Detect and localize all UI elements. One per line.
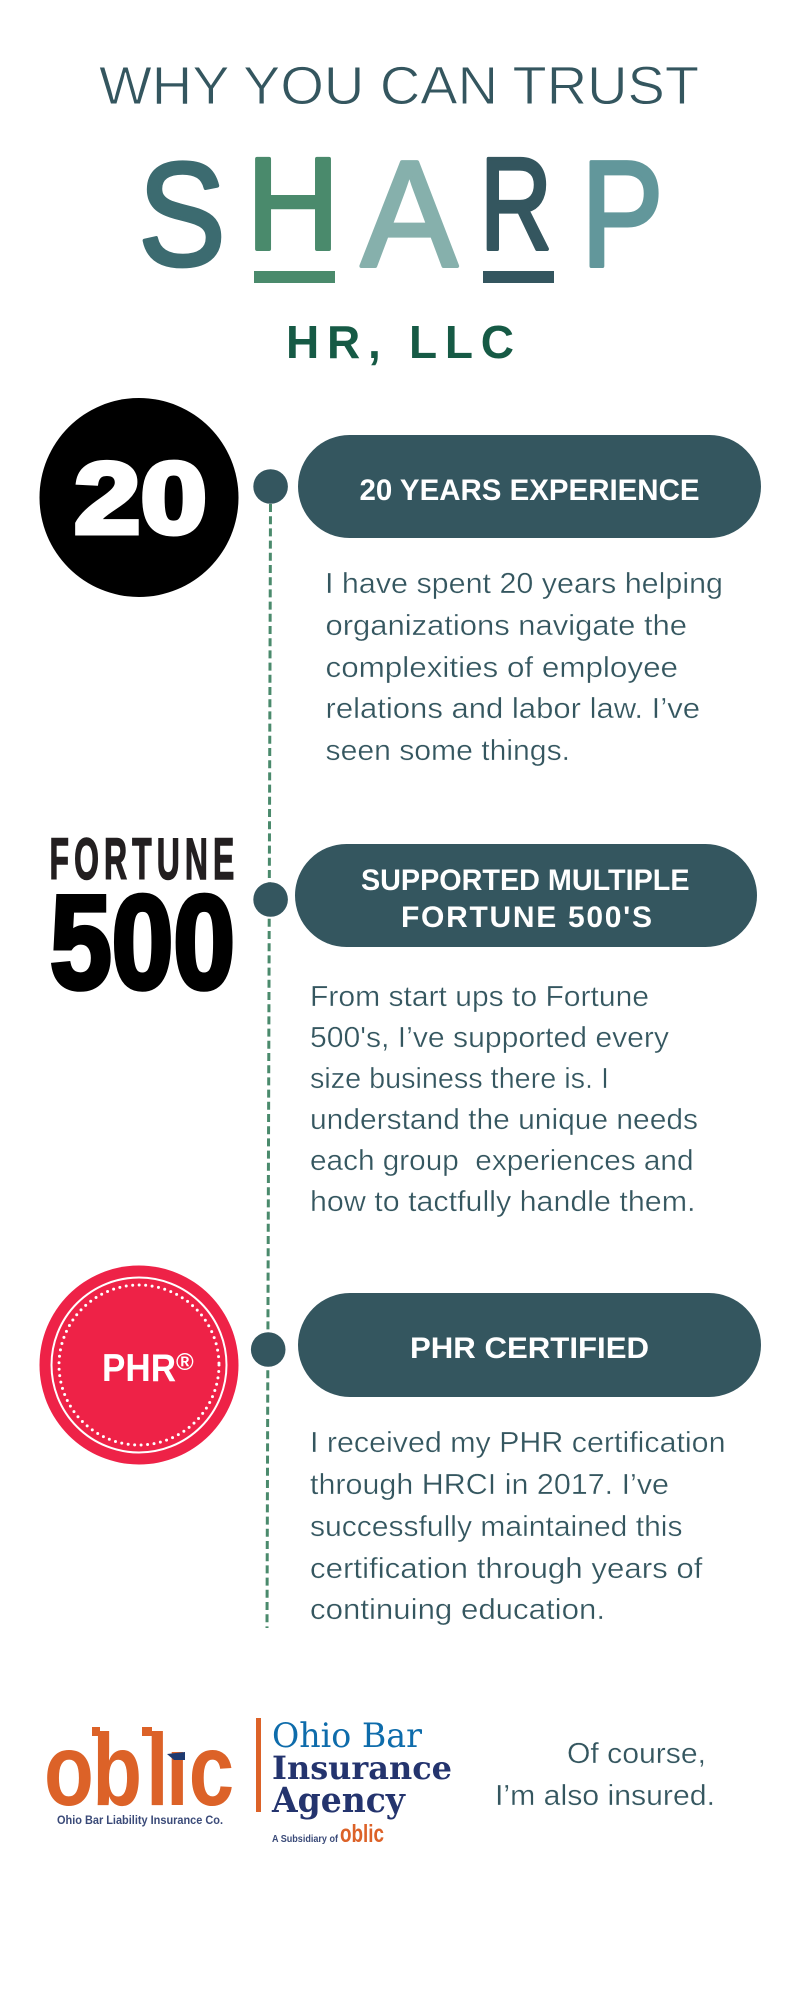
logo: Ohio Bar Insurance Agency [271,1716,452,1848]
icon: Fortune 500 logo: 500 [50,869,235,1017]
logo: Ohio Bar Insurance Agency: Insurance [272,1749,452,1787]
body text: each group experiences and [310,1145,694,1177]
body text: From start ups to Fortune [310,981,649,1013]
panel: PHR certified [40,1266,761,1626]
timeline dashed line [267,504,270,1628]
logo: OBLIC: Ohio Bar Liability Insurance Co. [57,1815,223,1827]
heading pill [298,1293,761,1397]
body text: size business there is. I [310,1063,609,1095]
icon: PHR badge [40,1266,238,1464]
logo: SHARP HR, LLC: R [480,130,552,277]
body text: I have spent 20 years helping [325,568,723,600]
heading pill [298,435,761,538]
heading pill [295,844,757,947]
body text: successfully maintained this [310,1511,682,1543]
body text: relations and labor law. I’ve [326,693,700,725]
body text: I received my PHR certification [310,1427,726,1459]
body text: 500's, I’ve supported every [310,1022,670,1054]
logo: OBLIC: oblic [44,1712,234,1827]
logo: SHARP HR, LLC: A [361,129,458,298]
logo: Ohio Bar Insurance Agency: Agency [271,1780,407,1821]
icon: PHR badge: ® [176,1349,194,1376]
logo: SHARP HR, LLC: H [246,130,340,277]
body text [325,568,723,767]
body text: seen some things. [326,735,570,767]
divider bar: logos [256,1718,261,1812]
panel: Fortune 500 [50,827,757,1218]
callout: insured note: Of course, [567,1738,706,1770]
body text: organizations navigate the [326,610,687,642]
body text: understand the unique needs [310,1104,698,1136]
title: WHY YOU CAN TRUST [99,56,699,116]
logo: Ohio Bar Insurance Agency: A Subsidiary of [272,1834,339,1845]
timeline dot [251,1332,286,1367]
heading pill: SUPPORTED MULTIPLE [361,864,690,897]
icon: Fortune 500 logo [50,827,235,1017]
callout: insured note [495,1738,715,1812]
timeline dot [253,469,288,504]
logo: SHARP HR, LLC: HR, LLC [286,316,514,368]
heading pill: PHR CERTIFIED [410,1332,649,1365]
body text: certification through years of [310,1553,704,1585]
logo: Ohio Bar Insurance Agency: oblic [340,1820,384,1848]
body text [310,1427,726,1626]
icon: 20 badge [40,398,238,597]
callout: insured note: I’m also insured. [495,1780,715,1812]
logo: SHARP HR, LLC: P [581,129,664,298]
icon: PHR badge: PHR [102,1347,176,1390]
logo: Ohio Bar Insurance Agency: Ohio Bar [272,1716,423,1756]
heading pill: 20 YEARS EXPERIENCE [360,474,700,507]
icon: Fortune 500 logo: FORTUNE [50,827,234,891]
heading pill: FORTUNE 500'S [401,901,652,934]
timeline dot [253,882,288,917]
logo: SHARP HR, LLC: S [138,133,226,297]
body text [310,981,698,1218]
logo: SHARP HR, LLC [138,129,664,368]
body text: how to tactfully handle them. [310,1186,696,1218]
body text: through HRCI in 2017. I’ve [310,1469,669,1501]
icon: 20 badge: 20 [74,443,207,555]
body text: complexities of employee [326,652,678,684]
panel: 20 years experience [40,398,761,767]
body text: continuing education. [310,1594,605,1626]
